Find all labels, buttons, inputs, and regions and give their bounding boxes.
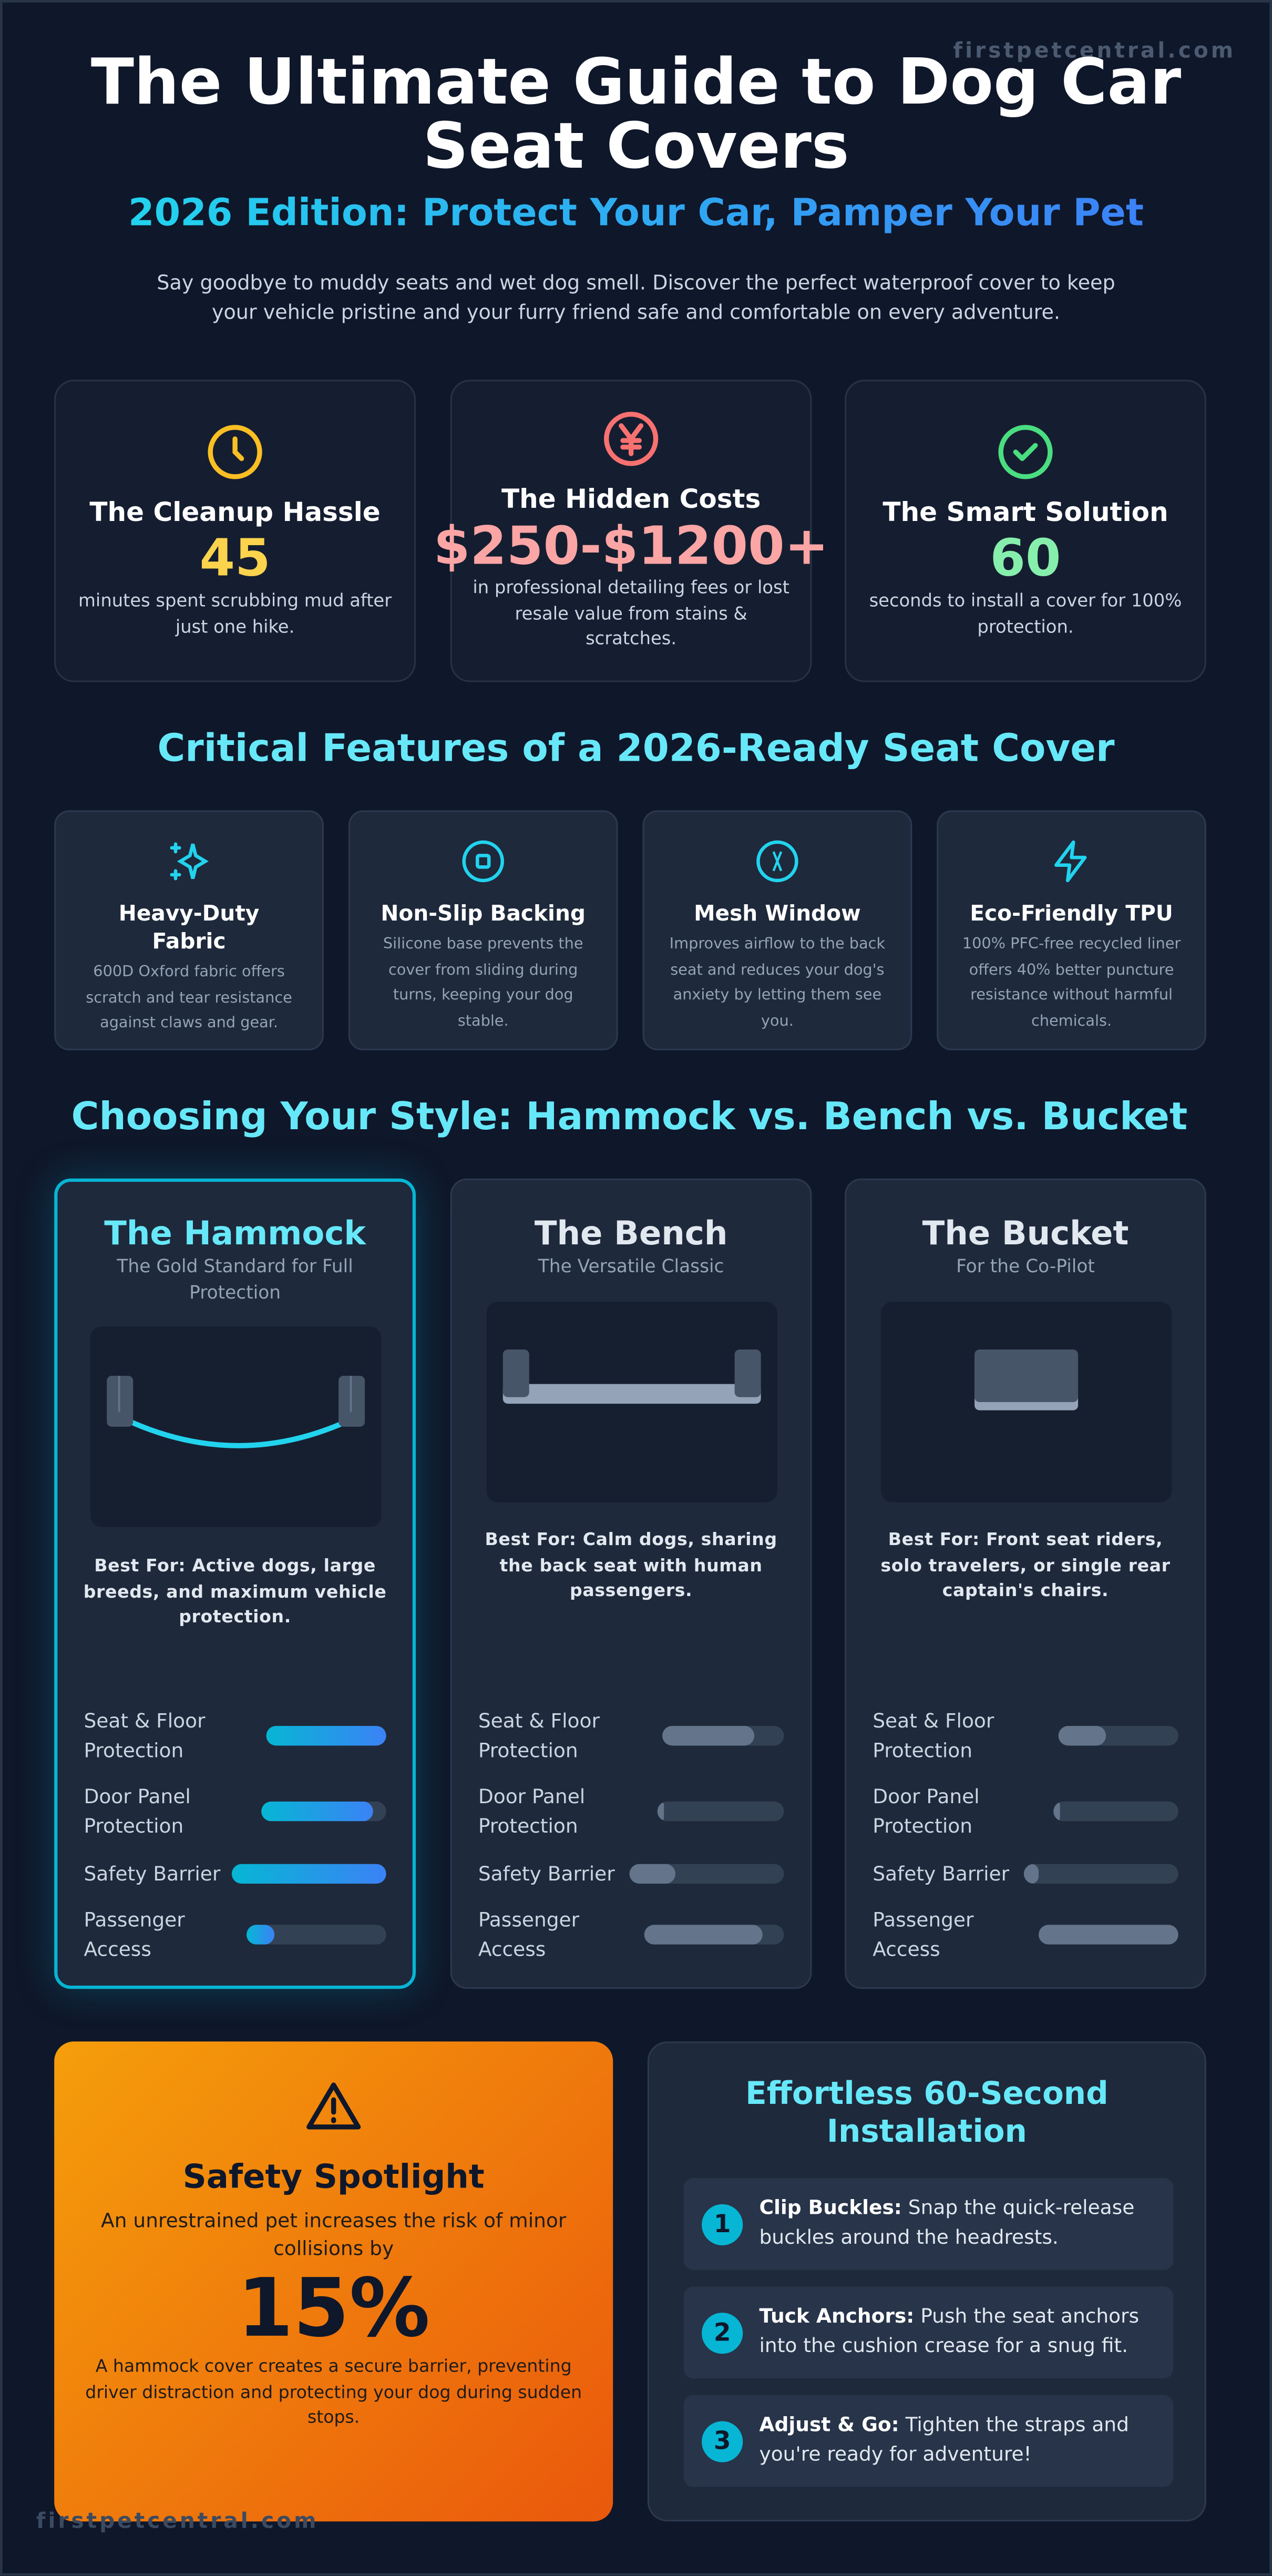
rating bars: Seat & Floor	[84, 1710, 206, 1732]
watermark bottom: firstpetcentral.com	[36, 2510, 319, 2534]
icon: bolt	[1054, 840, 1087, 882]
icon: yen	[604, 412, 658, 466]
icon: sparkle	[170, 842, 209, 880]
install heading: Installation	[827, 2114, 1027, 2150]
heading: features: Critical Features of a 2026-Ready Seat Cover	[157, 728, 1115, 771]
stat card: cleanup hassle: The Cleanup Hassle	[89, 496, 381, 528]
step 1	[684, 2178, 1173, 2270]
panel: installation	[648, 2041, 1206, 2521]
stat card: cleanup hassle	[54, 380, 416, 682]
style card: hammock: Passenger	[84, 1908, 185, 1931]
stat card: smart solution	[845, 380, 1206, 682]
style card: bucket	[845, 1179, 1206, 1989]
title: Seat Covers	[423, 110, 849, 184]
heading: styles: Choosing Your Style: Hammock vs. Bench vs. Bucket	[71, 1096, 1187, 1139]
style card: bench: Passenger	[478, 1908, 579, 1931]
illustration: hammock	[90, 1326, 381, 1527]
stat card: hidden costs: in professional detailing fees or lost resale value from stains & scratches.	[473, 577, 789, 650]
feature: heavy-duty fabric: Heavy-Duty	[119, 903, 259, 927]
style card: bucket: Passenger	[873, 1908, 973, 1931]
style card: bench: Protection	[478, 1815, 578, 1838]
rating bars: Protection	[478, 1739, 578, 1762]
install heading	[745, 2076, 1109, 2150]
feature: non-slip backing: Silicone base prevents the cover from sliding during turns, keeping your dog stable.	[383, 935, 583, 1030]
style card: bench: Safety Barrier	[478, 1862, 615, 1885]
best for: Best For: Active dogs, large breeds, and maximum vehicle protection.	[84, 1557, 386, 1627]
step 1: Clip Buckles: Snap the quick-release buckles around the headrests.	[759, 2196, 1134, 2248]
style card: hammock: Safety Barrier	[84, 1862, 220, 1885]
feature: heavy-duty fabric	[54, 810, 324, 1050]
panel: safety spotlight: An unrestrained pet increases the risk of minor collisions by	[101, 2209, 566, 2260]
stat card: smart solution: The Smart Solution	[883, 496, 1168, 528]
rating bars	[873, 1710, 1178, 1762]
feature: mesh window: Improves airflow to the back seat and reduces your dog's anxiety by letting them see you.	[670, 935, 885, 1030]
step 2: 2	[714, 2318, 731, 2347]
feature: eco TPU: Eco-Friendly TPU	[970, 903, 1173, 927]
style card: hammock: The Gold Standard for Full Protection	[117, 1256, 353, 1303]
panel: safety spotlight: A hammock cover creates a secure barrier, preventing driver distraction and protecting your dog during sudden stops.	[85, 2357, 582, 2428]
style card: bucket: Access	[873, 1938, 940, 1961]
stat card: smart solution: 60	[990, 529, 1061, 588]
icon: check	[998, 425, 1053, 479]
stat card: hidden costs: The Hidden Costs	[501, 484, 761, 515]
feature: heavy-duty fabric: 600D Oxford fabric offers scratch and tear resistance against claws and gear.	[86, 963, 292, 1033]
icon: mesh	[756, 840, 798, 882]
step 1: 1	[714, 2209, 731, 2238]
watermark top: firstpetcentral.com	[953, 39, 1236, 64]
illustration: bucket	[881, 1302, 1172, 1502]
style card: bench: Access	[478, 1938, 546, 1961]
rating bars: Protection	[84, 1739, 183, 1762]
panel: safety spotlight: 15%	[237, 2262, 430, 2355]
feature: mesh window: Mesh Window	[694, 903, 861, 927]
panel: safety spotlight: Safety Spotlight	[183, 2156, 485, 2196]
rating bars	[478, 1710, 784, 1762]
step 2	[684, 2286, 1173, 2378]
style card: hammock: Access	[84, 1938, 151, 1961]
style card: bucket: The Bucket	[922, 1213, 1129, 1252]
icon: clock	[208, 425, 262, 479]
feature: eco TPU: 100% PFC-free recycled liner offers 40% better puncture resistance without harmful chemicals.	[962, 935, 1181, 1030]
rating bars: Seat & Floor	[873, 1710, 994, 1732]
feature: heavy-duty fabric: Fabric	[152, 931, 226, 955]
style card: bucket: Protection	[873, 1815, 972, 1838]
stat card: hidden costs: $250-$1200+	[434, 515, 829, 577]
best for: Best For: Calm dogs, sharing the back seat with human passengers.	[485, 1530, 777, 1601]
subtitle: 2026 Edition: Protect Your Car, Pamper Your Pet	[128, 192, 1144, 235]
style card: hammock: Door Panel	[84, 1785, 191, 1808]
style card: hammock: Protection	[84, 1815, 183, 1838]
stat card: cleanup hassle: 45	[200, 529, 271, 588]
title: The Ultimate Guide to Dog Car	[91, 46, 1181, 120]
rating bars: Protection	[873, 1739, 972, 1762]
install heading: Effortless 60-Second	[745, 2076, 1109, 2112]
style card: bench: The Versatile Classic	[538, 1256, 724, 1277]
style card: bench: Door Panel	[478, 1785, 585, 1808]
step 3: 3	[714, 2426, 731, 2456]
style card: bucket: Safety Barrier	[873, 1862, 1009, 1885]
icon: warning	[306, 2082, 361, 2129]
style card: bench	[450, 1179, 812, 1989]
rating bars	[84, 1710, 386, 1762]
feature: mesh window	[643, 810, 912, 1050]
icon: target	[462, 840, 504, 882]
style card: hammock	[54, 1179, 416, 1989]
stat card: cleanup hassle: minutes spent scrubbing mud after just one hike.	[78, 590, 392, 637]
step 3	[684, 2395, 1173, 2487]
style card: bucket: Door Panel	[873, 1785, 980, 1808]
title	[91, 46, 1181, 184]
feature: non-slip backing	[348, 810, 618, 1050]
stat card: hidden costs	[450, 380, 812, 682]
style card: bench: The Bench	[535, 1213, 727, 1252]
panel: safety spotlight	[54, 2041, 613, 2521]
illustration: bench	[486, 1302, 777, 1502]
style card: hammock: The Hammock	[104, 1213, 366, 1252]
step 3: Adjust & Go: Tighten the straps and you're ready for adventure!	[759, 2413, 1129, 2466]
feature: eco TPU	[937, 810, 1206, 1050]
best for: Best For: Front seat riders, solo travelers, or single rear captain's chairs.	[880, 1530, 1171, 1601]
step 2: Tuck Anchors: Push the seat anchors into the cushion crease for a snug fit.	[759, 2305, 1139, 2357]
stat card: smart solution: seconds to install a cover for 100% protection.	[869, 590, 1182, 637]
feature: non-slip backing: Non-Slip Backing	[381, 903, 586, 927]
rating bars: Seat & Floor	[478, 1710, 600, 1732]
style card: bucket: For the Co-Pilot	[956, 1256, 1095, 1277]
intro text: Say goodbye to muddy seats and wet dog smell. Discover the perfect waterproof cover to keep your vehicle pristine and your furry friend safe and comfortable on every adventure.	[157, 271, 1115, 324]
